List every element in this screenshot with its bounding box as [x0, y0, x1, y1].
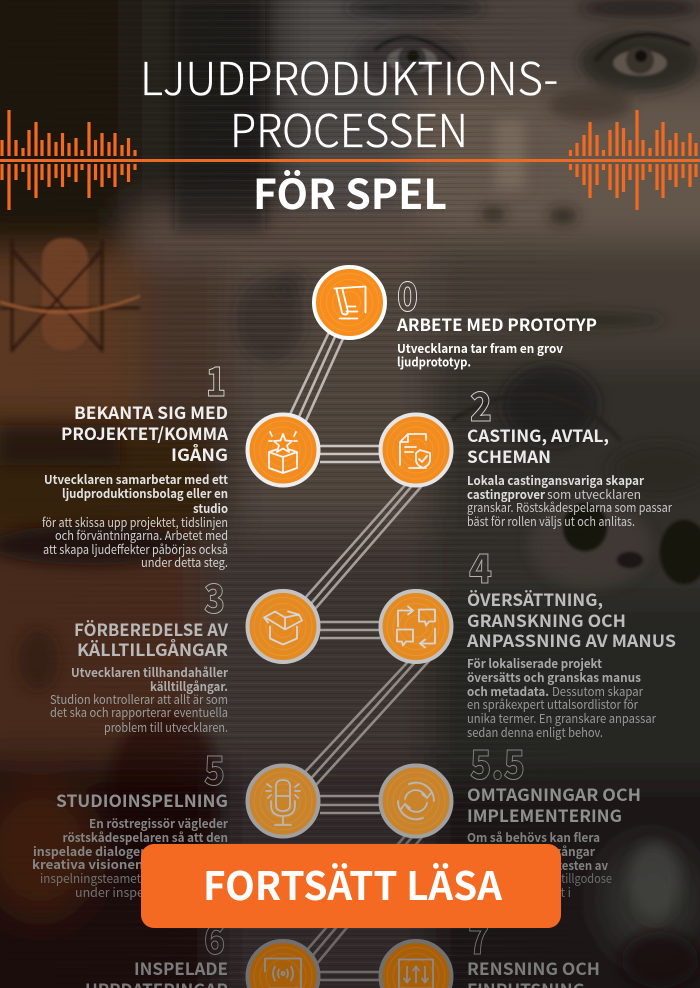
step 2: text: som utvecklaren	[547, 485, 641, 503]
step 2: circle	[380, 414, 452, 486]
step 6: text	[85, 908, 228, 988]
step 2: text: 2	[470, 375, 492, 433]
icon: screen with broadcast	[265, 958, 301, 988]
icon: contract with shield	[400, 434, 430, 468]
step 7: circle	[380, 941, 452, 988]
step 5: text: under inspelningens gång.	[75, 883, 228, 901]
step 1: text	[42, 350, 228, 571]
step 0: text	[396, 265, 597, 370]
step 5.5: text: IMPLEMENTERING	[467, 802, 622, 827]
step 1: text: och förväntningarna. Arbetet med	[55, 526, 228, 544]
step 5: circle	[248, 766, 318, 836]
step 3: text: Studion kontrollerar att allt är som	[50, 690, 228, 708]
step 0: text: 0	[397, 265, 418, 323]
connector lines	[285, 330, 439, 980]
step 5.5: text: Om så behövs kan flera	[467, 828, 600, 846]
waveform divider	[0, 110, 700, 210]
step 4: text: GRANSKNING OCH	[467, 607, 626, 632]
step 4: text: För lokaliserade projekt	[467, 654, 602, 672]
step 5: text: En röstregissör vägleder	[89, 814, 229, 832]
step 1: text: att skapa ljudeffekter påbörjas också	[43, 540, 228, 558]
step 4: text: översätts och granskas manus	[467, 668, 641, 686]
step 5: text: inspelade dialogen matchar den	[33, 842, 228, 860]
icon: left waveform	[2, 110, 135, 210]
step 5.5: text: behövas. Under testen av	[467, 856, 608, 874]
step 1: text: för att skissa upp projektet, tidslinjen	[42, 513, 228, 531]
step 4: text: Dessutom skapar	[552, 682, 643, 700]
step 5: text: inspelningsteamet att allt fungerar	[40, 869, 228, 887]
title: PROCESSEN	[230, 95, 468, 160]
step 5: text: kreativa visionen. Därefter ser	[32, 855, 229, 873]
step 2: text: castingprover	[467, 485, 546, 503]
step 5.5: circle	[380, 766, 452, 836]
step 3: text: källtillgångar.	[150, 677, 228, 695]
step 7: text: 7	[468, 908, 489, 966]
step 5.5: text: ändringar i spelet i	[467, 883, 571, 901]
step 4: circle	[380, 591, 452, 662]
step 5.5: text: OMTAGNINGAR OCH	[467, 781, 641, 806]
title	[140, 43, 558, 221]
title: FÖR SPEL	[253, 161, 447, 221]
step 0: circle	[314, 267, 385, 338]
step 5: text: röstskådespelaren så att den	[62, 828, 228, 846]
step 2: text	[467, 375, 672, 530]
step 1: text: under detta steg.	[141, 553, 228, 571]
step 1: text: Utvecklaren samarbetar med ett	[44, 470, 228, 488]
step 5: text: 5	[204, 739, 225, 797]
step 4: text: unika termer. En granskare anpassar	[467, 709, 656, 727]
step 4: text: 4	[469, 537, 492, 595]
step 5: text	[32, 739, 229, 901]
icon: arrows and chat bubbles	[397, 606, 435, 648]
step 3: text: FÖRBEREDELSE AV	[74, 616, 228, 641]
step 3: text: problem till utvecklaren.	[104, 718, 228, 736]
step 7: text: RENSNING OCH	[467, 955, 600, 980]
step 3: text: KÄLLTILLGÅNGAR	[77, 636, 228, 661]
icon: right waveform	[570, 110, 696, 210]
icon: mixer sliders	[399, 960, 433, 988]
step 4: text: sedan denna enligt behov.	[467, 723, 603, 741]
step 3: text	[50, 567, 229, 736]
step 1: circle	[248, 414, 318, 486]
step 3: text: 3	[204, 567, 225, 625]
step 5.5: text	[467, 733, 641, 901]
step 2: text: CASTING, AVTAL,	[467, 422, 609, 447]
step 4: text: en språkexpert uttalsordlistor för	[467, 695, 638, 713]
step 2: text: Lokala castingansvariga skapar	[467, 471, 645, 489]
step 7: text	[467, 908, 600, 988]
step 4: text: ÖVERSÄTTNING,	[467, 586, 603, 611]
step 5.5: text: inspelningsomgångar	[467, 842, 596, 860]
step 5.5: text: dialogen kan man tillgodose	[467, 869, 612, 887]
button: continue reading	[141, 844, 561, 928]
step 0: text: ljudprototyp.	[397, 352, 471, 370]
step 4: text: ANPASSNING AV MANUS	[466, 627, 676, 652]
step 6: text: 6	[204, 908, 225, 966]
step 0: text: ARBETE MED PROTOTYP	[396, 311, 597, 336]
icon: microphone	[266, 780, 300, 825]
title: LJUDPRODUKTIONS-	[140, 43, 558, 108]
step 0: text: Utvecklarna tar fram en grov	[397, 339, 563, 357]
step 5: text: STUDIOINSPELNING	[56, 787, 228, 812]
step 2: text: granskar. Röstskådespelarna som passar	[467, 498, 672, 516]
step 1: text: ljudproduktionsbolag eller en	[62, 484, 228, 502]
step 1: text: 1	[206, 350, 226, 408]
step 1: text: PROJEKTET/KOMMA	[61, 420, 228, 445]
icon: refresh arrows	[398, 783, 434, 819]
step 6: circle	[248, 941, 318, 988]
step 4: text: och metadata.	[467, 682, 549, 700]
step 4: text	[466, 537, 676, 741]
step 2: text: bäst för rollen väljs ut och anlitas.	[467, 512, 635, 530]
step 1: text: BEKANTA SIG MED	[74, 399, 228, 424]
step 1: text: studio	[193, 499, 228, 517]
step 3: text: Utvecklaren tillhandahåller	[71, 663, 229, 681]
step 3: circle	[248, 591, 318, 662]
step 2: text: SCHEMAN	[467, 443, 551, 468]
step 5.5: text: 5.5	[470, 733, 525, 791]
step 6: text: INSPELADE	[134, 955, 228, 980]
button: continue reading: FORTSÄTT LÄSA	[203, 856, 503, 912]
icon: open box	[264, 612, 302, 644]
step 1: text: IGÅNG	[171, 441, 228, 466]
icon: box with star	[269, 432, 297, 473]
step 3: text: det ska och rapporterar eventuella	[50, 703, 228, 721]
icon: document and pen	[334, 286, 366, 318]
